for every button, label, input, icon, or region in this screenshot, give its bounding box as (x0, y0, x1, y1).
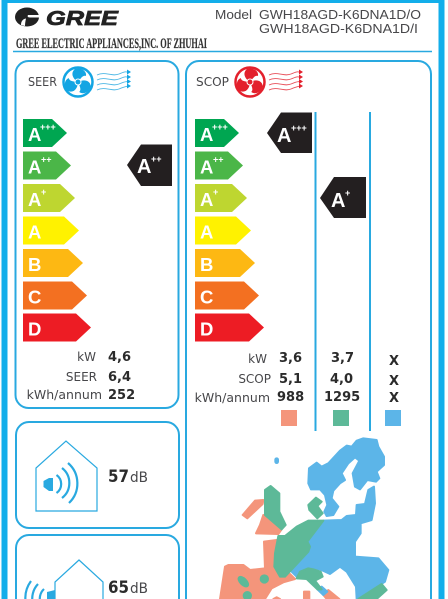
SCOP rating badge A+: A (331, 190, 345, 212)
icon: outdoor house with speaker (25, 560, 103, 599)
bar A+: A (200, 189, 213, 210)
SCOP rating badge A+++: A (277, 125, 291, 147)
bar A+++ (195, 119, 239, 147)
SCOP rating badge A+: + (345, 188, 350, 198)
icon: blue fan (62, 68, 92, 96)
bar A+: + (213, 187, 218, 197)
bar C: C (28, 286, 41, 308)
panel: indoor noise (16, 422, 179, 528)
bar A+++: A (28, 124, 41, 145)
SCOP column 1 values (277, 351, 304, 405)
SCOP rating badge A+ (320, 177, 366, 218)
bar A: A (28, 222, 41, 242)
SCOP rating badge A+++ (267, 112, 312, 153)
bar A+++: A (200, 124, 213, 145)
SEER values: SEER (66, 370, 97, 384)
SCOP column 1 values: 988 (277, 390, 304, 405)
SCOP row labels: SCOP (238, 372, 271, 386)
SCOP column 2 values: 4,0 (330, 372, 353, 387)
map of Europe climate zones (220, 438, 388, 599)
SCOP row labels (195, 352, 271, 405)
outdoor noise value: 65 (108, 578, 129, 598)
SCOP rating badge A+++: +++ (291, 123, 307, 133)
SCOP column 3 values: X (389, 374, 399, 389)
SCOP column 2 values: 3,7 (331, 351, 354, 366)
bar D (23, 314, 91, 342)
panel: outdoor noise (16, 535, 179, 599)
zone: cold (blue) (275, 438, 388, 599)
SEER values: 252 (108, 388, 135, 403)
model numbers: Model (215, 8, 252, 22)
SEER values: 6,4 (108, 370, 131, 385)
panel: SCOP (186, 61, 431, 599)
outdoor noise value: dB (130, 581, 148, 597)
bar D: D (200, 318, 213, 340)
SCOP row labels: kW (248, 352, 267, 366)
SEER efficiency scale (23, 119, 91, 342)
bar A+++: +++ (212, 122, 228, 132)
logo: GREE (15, 8, 119, 30)
bar A+++: +++ (40, 122, 56, 132)
bar A+: A (28, 189, 41, 210)
SCOP heading: SCOP (196, 75, 229, 89)
SCOP row labels: kWh/annum (195, 390, 270, 405)
bar A++ (23, 152, 71, 180)
zone: average (green) (237, 486, 387, 599)
bar A++: A (200, 156, 213, 178)
bar C (195, 282, 259, 310)
icon: red fan (234, 68, 264, 96)
company name: GREE ELECTRIC APPLIANCES,INC. OF ZHUHAI (16, 36, 207, 52)
SEER heading: SEER (28, 75, 57, 89)
panel: SEER (16, 61, 178, 408)
bar A++ (195, 152, 243, 180)
SCOP column 2 values (324, 351, 360, 405)
SEER rating badge A++: A (137, 156, 151, 178)
SCOP column 3 values: X (389, 391, 399, 406)
bar A: A (200, 222, 213, 242)
bar C (23, 282, 87, 310)
indoor noise value (108, 467, 148, 487)
SCOP efficiency scale (195, 119, 264, 342)
bar A+ (195, 184, 247, 212)
SCOP column 1 values: 5,1 (279, 372, 302, 387)
bar A+: + (41, 187, 46, 197)
indoor noise value: dB (130, 470, 148, 486)
zone: warm (salmon) (220, 500, 339, 599)
logo: GREE: GREE (46, 8, 119, 30)
model numbers (215, 8, 421, 36)
SCOP column 1 values: 3,6 (279, 351, 302, 366)
bar A++: ++ (41, 154, 52, 164)
bar A+ (23, 184, 75, 212)
bar B: B (200, 254, 213, 275)
icon: blue airflow lines (97, 70, 131, 90)
icon: indoor house with speaker (36, 441, 97, 511)
SCOP column 2 values: 1295 (324, 390, 360, 405)
icon: red airflow lines (269, 70, 303, 90)
SEER values: kWh/annum (27, 387, 102, 402)
model numbers: GWH18AGD-K6DNA1D/I (259, 22, 418, 36)
bar A (23, 216, 79, 244)
SCOP column 3 values: X (389, 354, 399, 369)
bar B (195, 249, 255, 277)
outdoor noise value (108, 578, 148, 598)
bar C: C (200, 286, 213, 308)
bar A++: A (28, 156, 41, 178)
climate legend swatches (281, 410, 401, 426)
bar B: B (28, 254, 41, 275)
model numbers: GWH18AGD-K6DNA1D/O (259, 8, 421, 22)
SEER values (27, 350, 135, 403)
SEER rating badge A++ (127, 144, 172, 186)
bar A+++ (23, 119, 67, 147)
bar D (195, 314, 264, 342)
bar B (23, 249, 83, 277)
SEER values: 4,6 (108, 350, 131, 365)
indoor noise value: 57 (108, 467, 129, 487)
bar D: D (28, 318, 41, 340)
bar A++: ++ (213, 154, 224, 164)
SEER values: kW (77, 350, 96, 364)
SCOP column 3 values (389, 354, 399, 406)
SEER rating badge A++: ++ (151, 154, 162, 164)
bar A (195, 216, 251, 244)
